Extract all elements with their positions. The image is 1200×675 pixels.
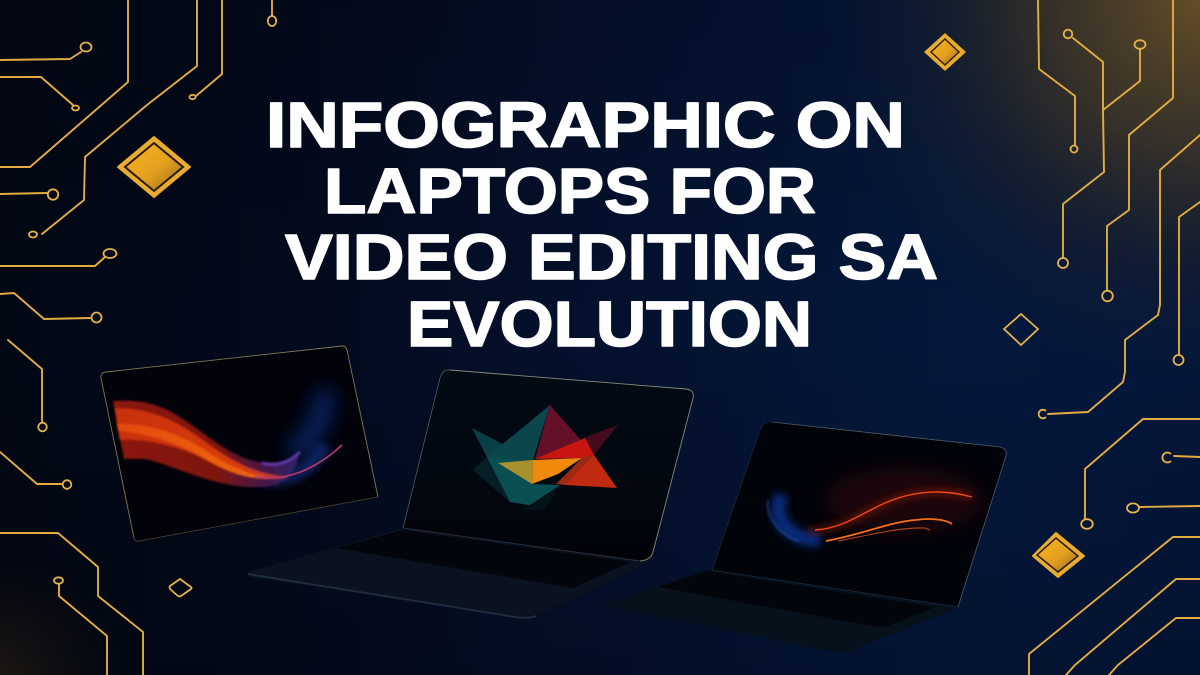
- front edge highlight: [248, 574, 536, 618]
- screen art: light streaks: [768, 468, 985, 541]
- title: [266, 89, 938, 360]
- title: INFOGRAPHIC ON: [266, 89, 905, 161]
- title: EVOLUTION: [407, 288, 812, 360]
- laptop base: [248, 528, 653, 618]
- laptop: right: [600, 422, 1006, 652]
- keyboard deck: [658, 571, 935, 628]
- screen art: geometric logo: [472, 405, 618, 510]
- icon: outline diamond bottom left: [170, 579, 192, 596]
- laptop screen: [712, 422, 1006, 607]
- laptop: centre: [248, 370, 693, 618]
- title: VIDEO EDITING SA: [285, 221, 938, 293]
- circuit traces: top left: [0, 0, 276, 322]
- screen art: orange and blue wave: [113, 390, 342, 487]
- icon: gold chip bottom right: [1033, 533, 1084, 577]
- icon: gold chip top: [925, 34, 965, 70]
- circuit traces: top right: [1038, 0, 1200, 418]
- circuit traces: bottom right: [1029, 419, 1200, 675]
- laptop: left tablet screen: [101, 346, 378, 541]
- title: LAPTOPS FOR: [324, 155, 816, 227]
- laptop base: [600, 570, 958, 652]
- laptop screen: [403, 370, 693, 561]
- icon: outline diamond right: [1004, 314, 1038, 345]
- keyboard deck: [337, 530, 630, 588]
- icon: gold chip left: [118, 137, 190, 197]
- circuit traces: bottom left: [0, 340, 143, 675]
